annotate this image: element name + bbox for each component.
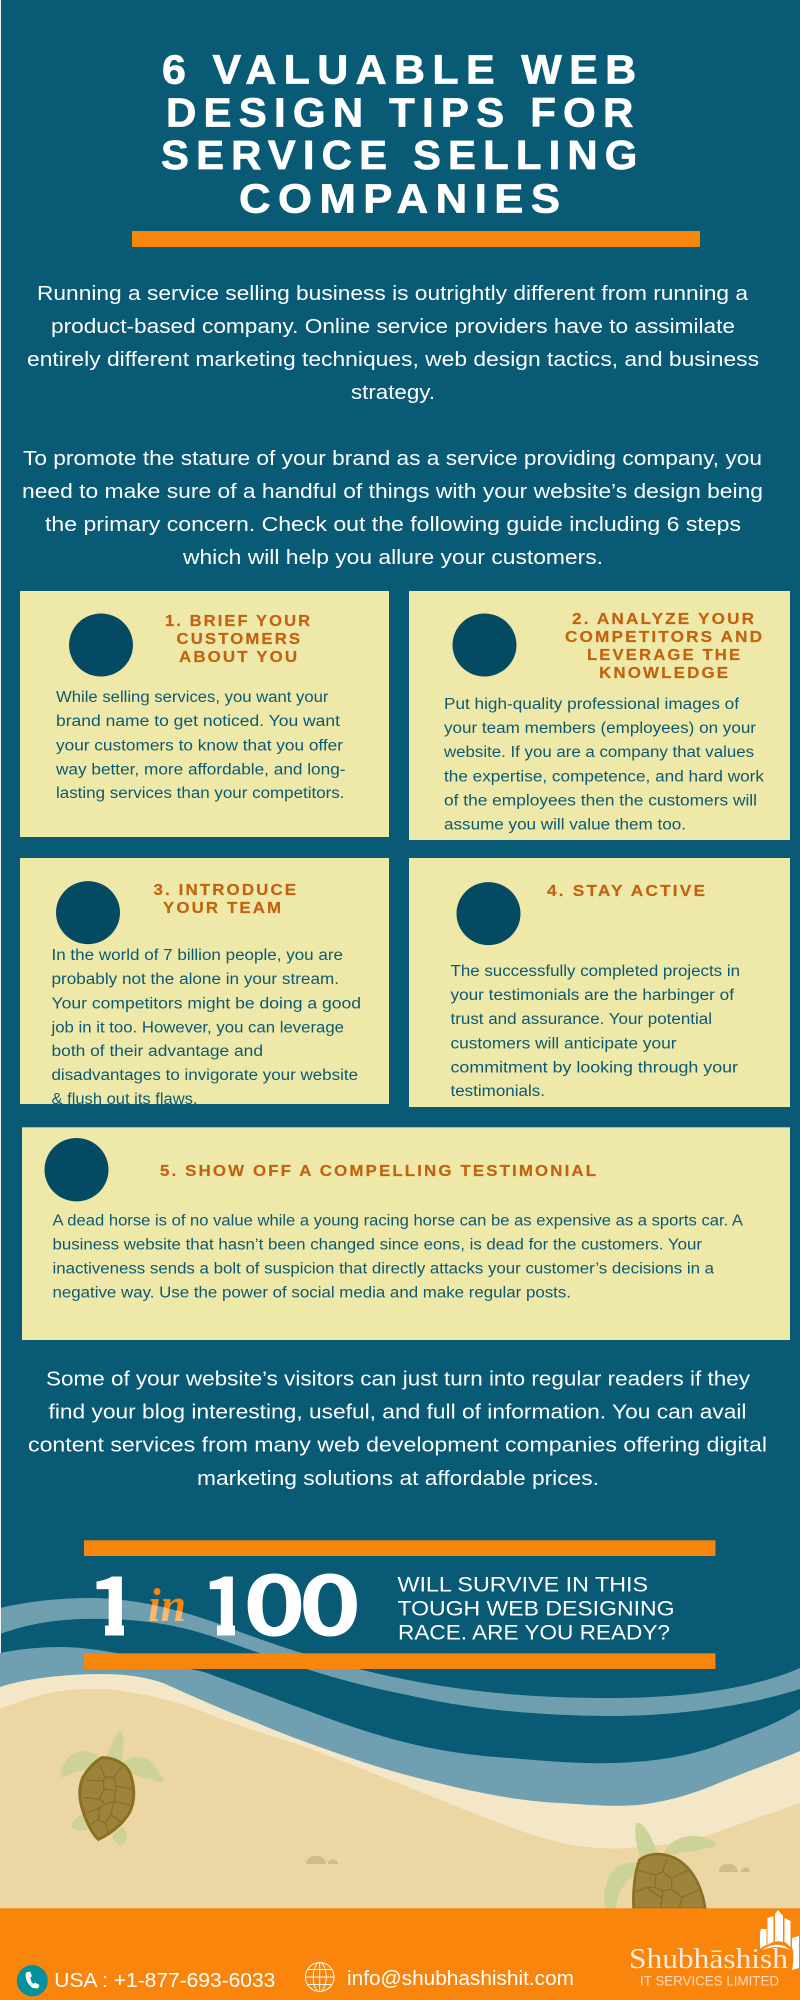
text: tip 3 body: & flush out its flaws. xyxy=(52,1091,198,1108)
heading: tip 5: 5. SHOW OFF A COMPELLING TESTIMONIAL xyxy=(160,1163,598,1180)
statistic caption: RACE. ARE YOU READY? xyxy=(398,1622,670,1645)
icon: turtle left xyxy=(61,1731,163,1845)
text: tip 4 body: trust and assurance. Your potential xyxy=(450,1011,712,1028)
intro paragraph 1: product-based company. Online service providers have to assimilate xyxy=(51,316,735,338)
heading: tip 2 xyxy=(565,611,764,682)
text: tip 1 body xyxy=(55,689,345,802)
heading: tip 3: YOUR TEAM xyxy=(163,900,283,917)
heading: tip 1 xyxy=(165,613,312,666)
icon: tip 5 circle xyxy=(44,1138,108,1201)
icon: turtle right xyxy=(604,1823,717,1909)
logo: Shubhashish IT Services Limited: Shubhāshish xyxy=(629,1944,788,1975)
text: tip 2 body: website. If you are a company that values xyxy=(443,744,754,761)
text: tip 3 body: disadvantages to invigorate your website xyxy=(52,1067,358,1084)
title: COMPANIES xyxy=(239,175,568,221)
text: tip 1 body: While selling services, you want your xyxy=(56,689,328,706)
statistic: 1 in 100: 1 xyxy=(201,1540,249,1660)
intro paragraph 1: Running a service selling business is outrightly different from running a xyxy=(37,283,749,305)
title: 6 VALUABLE WEB xyxy=(162,46,644,92)
icon: tip 2 circle xyxy=(452,614,516,676)
icon: phone xyxy=(17,1965,48,1996)
heading: tip 1: CUSTOMERS xyxy=(176,631,302,648)
closing paragraph: Some of your website’s visitors can just turn into regular readers if they xyxy=(46,1369,750,1391)
text: tip 4 body: customers will anticipate your xyxy=(450,1035,676,1052)
wave: shore water band xyxy=(0,1647,800,1910)
text: tip 1 body: brand name to get noticed. You want xyxy=(56,713,341,730)
heading: tip 1: 1. BRIEF YOUR xyxy=(165,613,312,630)
closing paragraph xyxy=(28,1369,767,1490)
panel: tip 4 xyxy=(409,858,790,1107)
statistic caption xyxy=(398,1574,674,1645)
panel: tip 2 xyxy=(409,591,790,840)
heading: tip 2: COMPETITORS AND xyxy=(565,629,764,646)
icon: tip 3 circle xyxy=(56,881,120,944)
icon: globe xyxy=(305,1962,334,1992)
title underline bar xyxy=(132,231,700,247)
text: tip 4 body: testimonials. xyxy=(450,1083,545,1100)
text: tip 4 body: commitment by looking through your xyxy=(450,1059,738,1076)
text: tip 1 body: lasting services than your competitors. xyxy=(56,785,344,802)
text: tip 2 body: of the employees then the customers will xyxy=(444,793,757,810)
text: tip 3 body: job in it too. However, you can leverage xyxy=(50,1020,344,1036)
panel: tip 3 xyxy=(20,858,389,1108)
heading: tip 3 xyxy=(154,882,298,917)
heading: tip 1: ABOUT YOU xyxy=(179,649,299,666)
heading: tip 4: 4. STAY ACTIVE xyxy=(547,883,707,900)
text: tip 2 body: Put high-quality professional images of xyxy=(444,696,740,713)
intro paragraph 1: strategy. xyxy=(351,382,435,404)
footer band xyxy=(0,1908,800,2000)
logo: Shubhashish IT Services Limited xyxy=(629,1910,799,1989)
text: tip 3 body: Your competitors might be doing a good xyxy=(52,995,361,1012)
text: tip 2 body xyxy=(443,696,764,833)
text: tip 3 body: both of their advantage and xyxy=(52,1043,263,1060)
logo: Shubhashish IT Services Limited: IT SERVICES LIMITED xyxy=(640,1974,779,1989)
text: tip 3 body xyxy=(50,947,361,1108)
icon: logo buildings xyxy=(760,1910,799,1970)
heading: tip 2: LEVERAGE THE xyxy=(587,647,742,664)
text: tip 1 body: your customers to know that you offer xyxy=(56,738,343,754)
closing paragraph: marketing solutions at affordable prices. xyxy=(197,1468,599,1490)
icon: tip 1 circle xyxy=(69,614,133,676)
heading: tip 2: KNOWLEDGE xyxy=(599,665,730,682)
text: tip 5 body: A dead horse is of no value while a young racing horse can be as expensive as a sports car. A xyxy=(52,1213,744,1230)
text: tip 2 body: the expertise, competence, and hard work xyxy=(444,768,764,785)
intro paragraph 2: To promote the stature of your brand as a service providing company, you xyxy=(23,448,762,470)
statistic: 1 in 100 xyxy=(87,1540,362,1660)
text: tip 4 body: your testimonials are the harbinger of xyxy=(450,987,735,1004)
statistic: 1 in 100: 1 xyxy=(87,1540,140,1659)
title: SERVICE SELLING xyxy=(161,132,644,178)
phone number: USA : +1-877-693-6033 xyxy=(54,1970,275,1992)
intro paragraph 1: entirely different marketing techniques, web design tactics, and business xyxy=(27,349,759,371)
heading: tip 2: 2. ANALYZE YOUR xyxy=(572,611,756,628)
script word: in: in xyxy=(148,1579,186,1632)
text: tip 4 body xyxy=(450,963,740,1100)
statistic caption: WILL SURVIVE IN THIS xyxy=(398,1574,648,1597)
closing paragraph: find your blog interesting, useful, and full of information. You can avail xyxy=(48,1402,746,1424)
title xyxy=(161,46,644,221)
statistic bottom bar xyxy=(84,1653,716,1669)
text: tip 5 body: negative way. Use the power of social media and make regular posts. xyxy=(52,1285,571,1302)
intro paragraph 2 xyxy=(22,448,763,569)
email address: info@shubhashishit.com xyxy=(347,1968,574,1990)
text: tip 2 body: your team members (employees) on your xyxy=(444,720,756,737)
beach sand xyxy=(0,1689,800,1910)
text: tip 4 body: The successfully completed projects in xyxy=(450,963,740,980)
panel: tip 5 xyxy=(22,1127,790,1340)
text: tip 3 body: In the world of 7 billion people, you are xyxy=(52,947,343,964)
statistic top bar xyxy=(84,1540,716,1556)
closing paragraph: content services from many web development companies offering digital xyxy=(28,1435,767,1457)
intro paragraph 2: need to make sure of a handful of things with your website’s design being xyxy=(22,481,763,503)
statistic caption: TOUGH WEB DESIGNING xyxy=(398,1598,674,1621)
heading: tip 3: 3. INTRODUCE xyxy=(154,882,298,899)
icon: tip 4 circle xyxy=(456,882,520,945)
text: tip 1 body: way better, more affordable, and long- xyxy=(55,762,345,778)
text: tip 2 body: assume you will value them too. xyxy=(444,816,686,833)
panel: tip 1 xyxy=(20,591,389,837)
text: tip 5 body: inactiveness sends a bolt of suspicion that directly attacks your customer’s decisions in a xyxy=(52,1261,714,1278)
text: tip 5 body xyxy=(52,1213,744,1302)
wave: upper water band xyxy=(0,1598,800,1716)
intro paragraph 2: the primary concern. Check out the following guide including 6 steps xyxy=(45,514,741,536)
intro paragraph 1 xyxy=(27,283,759,404)
icon: rocks right xyxy=(719,1864,750,1872)
statistic: 1 in 100: 00 xyxy=(243,1542,362,1660)
wave: wet sand band xyxy=(0,1674,800,1910)
text: tip 5 body: business website that hasn’t been changed since eons, is dead for the customers. Your xyxy=(52,1237,702,1254)
intro paragraph 2: which will help you allure your customers. xyxy=(182,547,603,569)
text: tip 3 body: probably not the alone in your stream. xyxy=(52,971,339,988)
icon: rocks centre xyxy=(306,1856,338,1864)
title: DESIGN TIPS FOR xyxy=(166,90,640,136)
